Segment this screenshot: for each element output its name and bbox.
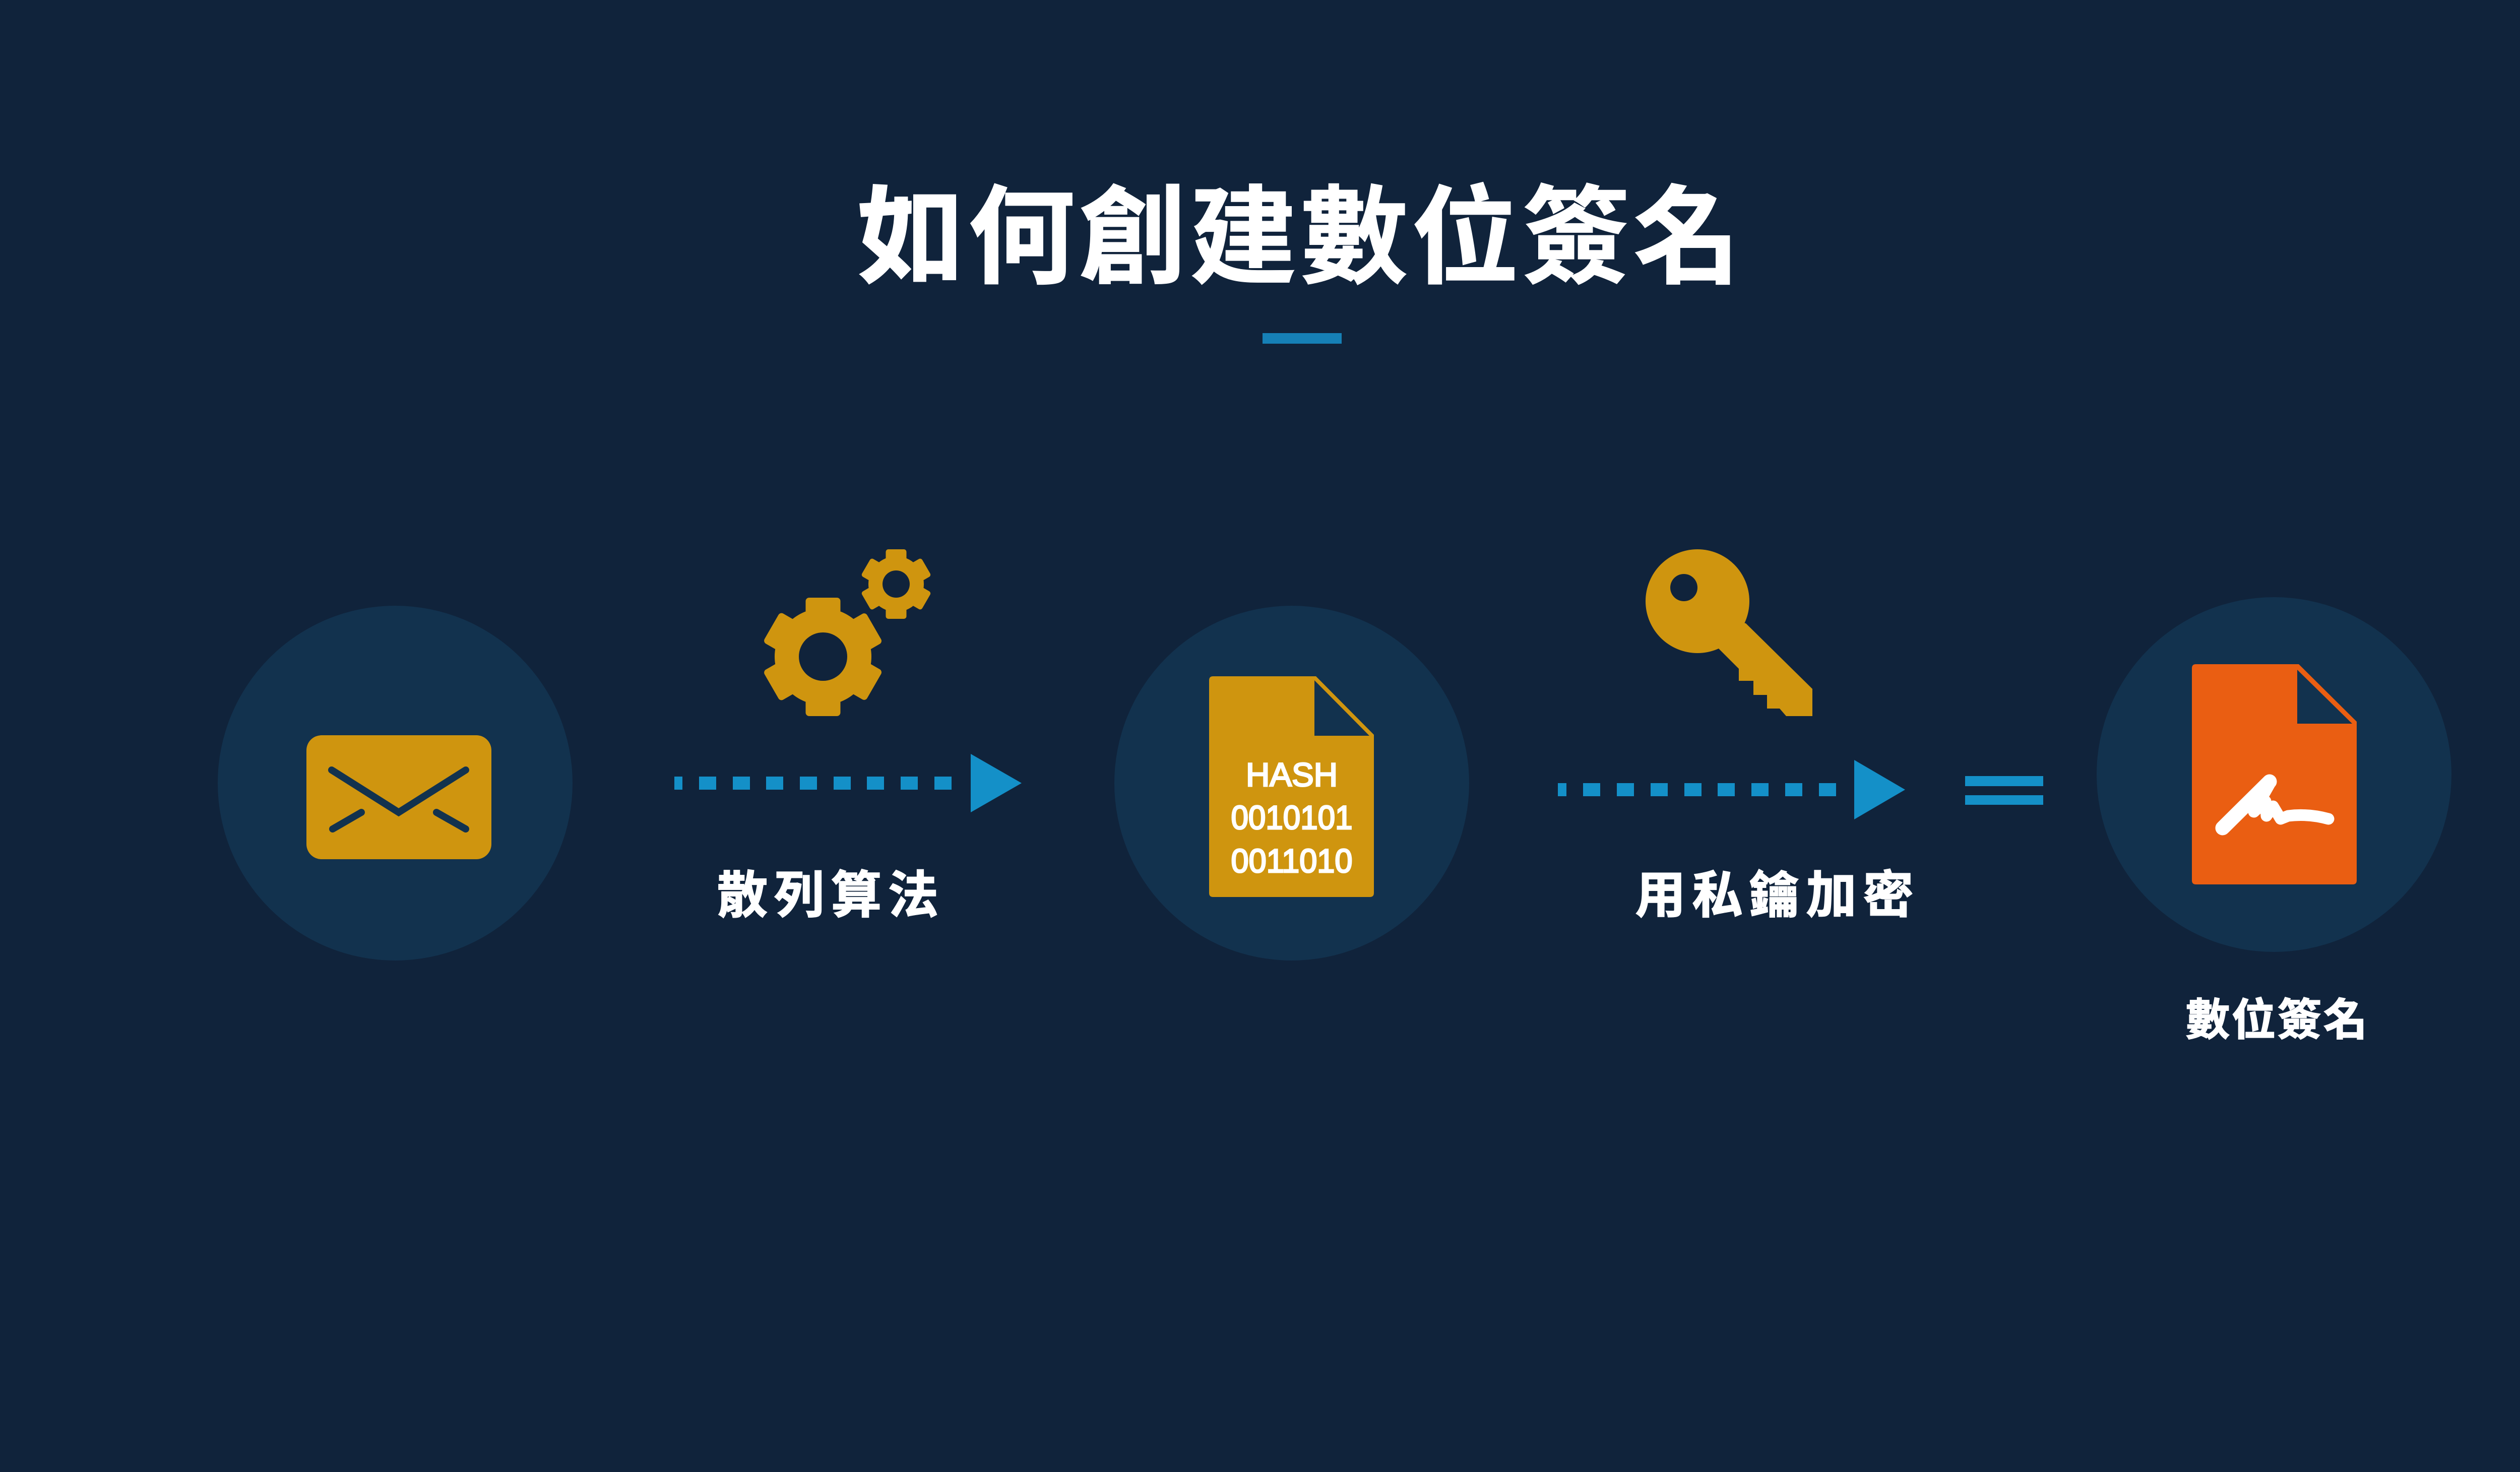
step 3: digital signature <box>2097 597 2451 952</box>
arrow: hash algorithm <box>674 754 1022 812</box>
title underline <box>1263 333 1342 344</box>
label: digital signature: 數位簽名 <box>2186 996 2369 1045</box>
signature stroke <box>2223 782 2328 828</box>
icon: hash document: 0010101 <box>1231 799 1353 836</box>
arrow: private key encryption <box>1558 760 1905 819</box>
small gear <box>861 549 931 619</box>
circle background <box>218 606 573 961</box>
icon: key <box>1646 549 1812 716</box>
icon: signed document <box>2192 664 2357 884</box>
icon: hash document: 0011010 <box>1231 842 1353 879</box>
circle background <box>2097 597 2451 952</box>
label: hash algorithm: 散列算法 <box>717 867 945 924</box>
step 2: hash document <box>1114 606 1469 961</box>
icon: envelope <box>306 735 491 859</box>
icon: gears <box>763 549 931 716</box>
document text: HASH <box>1246 756 1338 793</box>
large gear <box>763 598 883 716</box>
label: private key encryption: 用私鑰加密 <box>1635 867 1920 924</box>
step 1: message envelope <box>218 606 573 961</box>
title: 如何創建數位簽名 <box>857 178 1744 297</box>
icon: hash document <box>1209 676 1374 897</box>
icon: equals sign <box>1965 776 2043 805</box>
circle background <box>1114 606 1469 961</box>
